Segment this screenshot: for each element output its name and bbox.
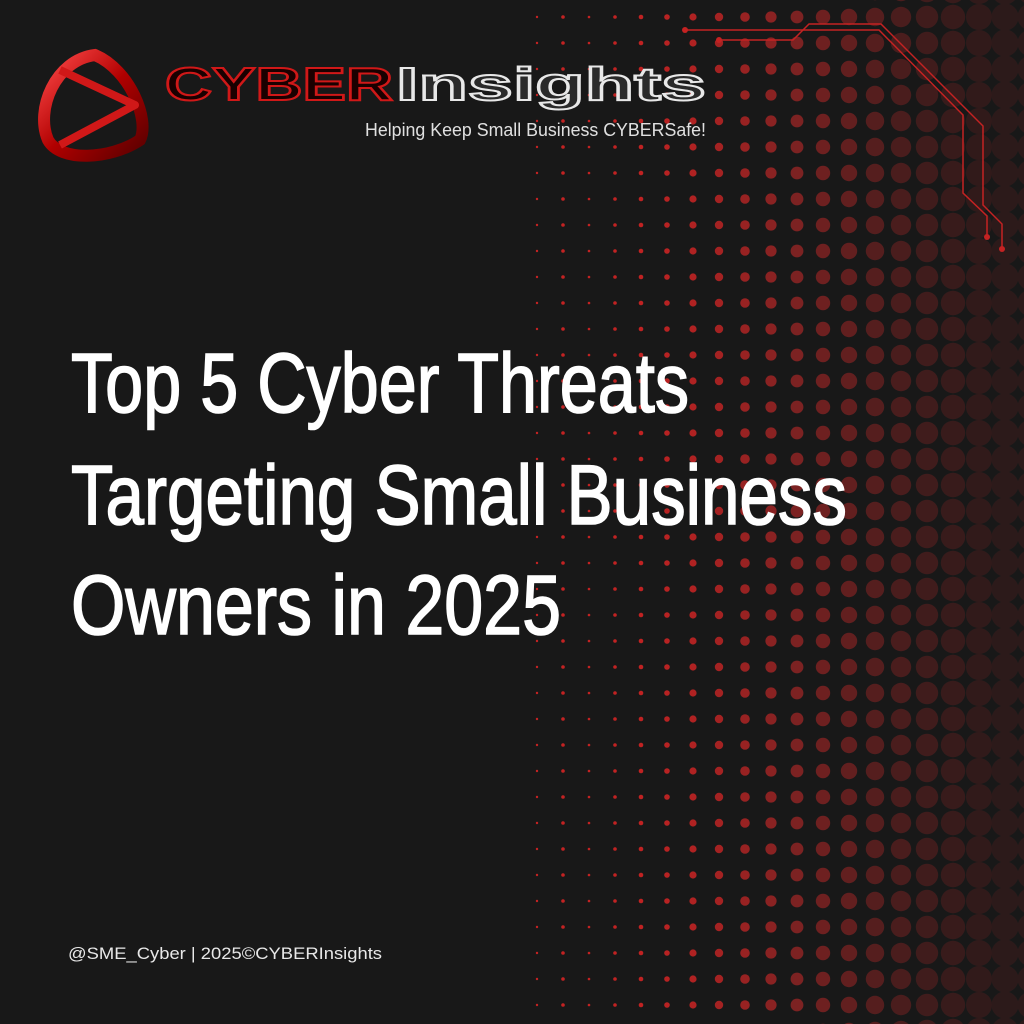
title: Owners in 2025: [71, 558, 561, 652]
title: Top 5 Cyber Threats: [71, 336, 689, 430]
logo wordmark: [165, 58, 706, 110]
tagline: Helping Keep Small Business CYBERSafe!: [365, 120, 706, 140]
title: [71, 336, 847, 652]
logo icon: red ring: [44, 55, 143, 156]
logo wordmark: Insights: [396, 58, 706, 110]
logo wordmark: CYBER: [165, 58, 393, 110]
title: Targeting Small Business: [71, 448, 847, 542]
circuit lines: [682, 24, 1005, 252]
footer: @SME_Cyber | 2025©CYBERInsights: [68, 944, 382, 963]
halftone dot pattern: [524, 0, 1024, 1024]
